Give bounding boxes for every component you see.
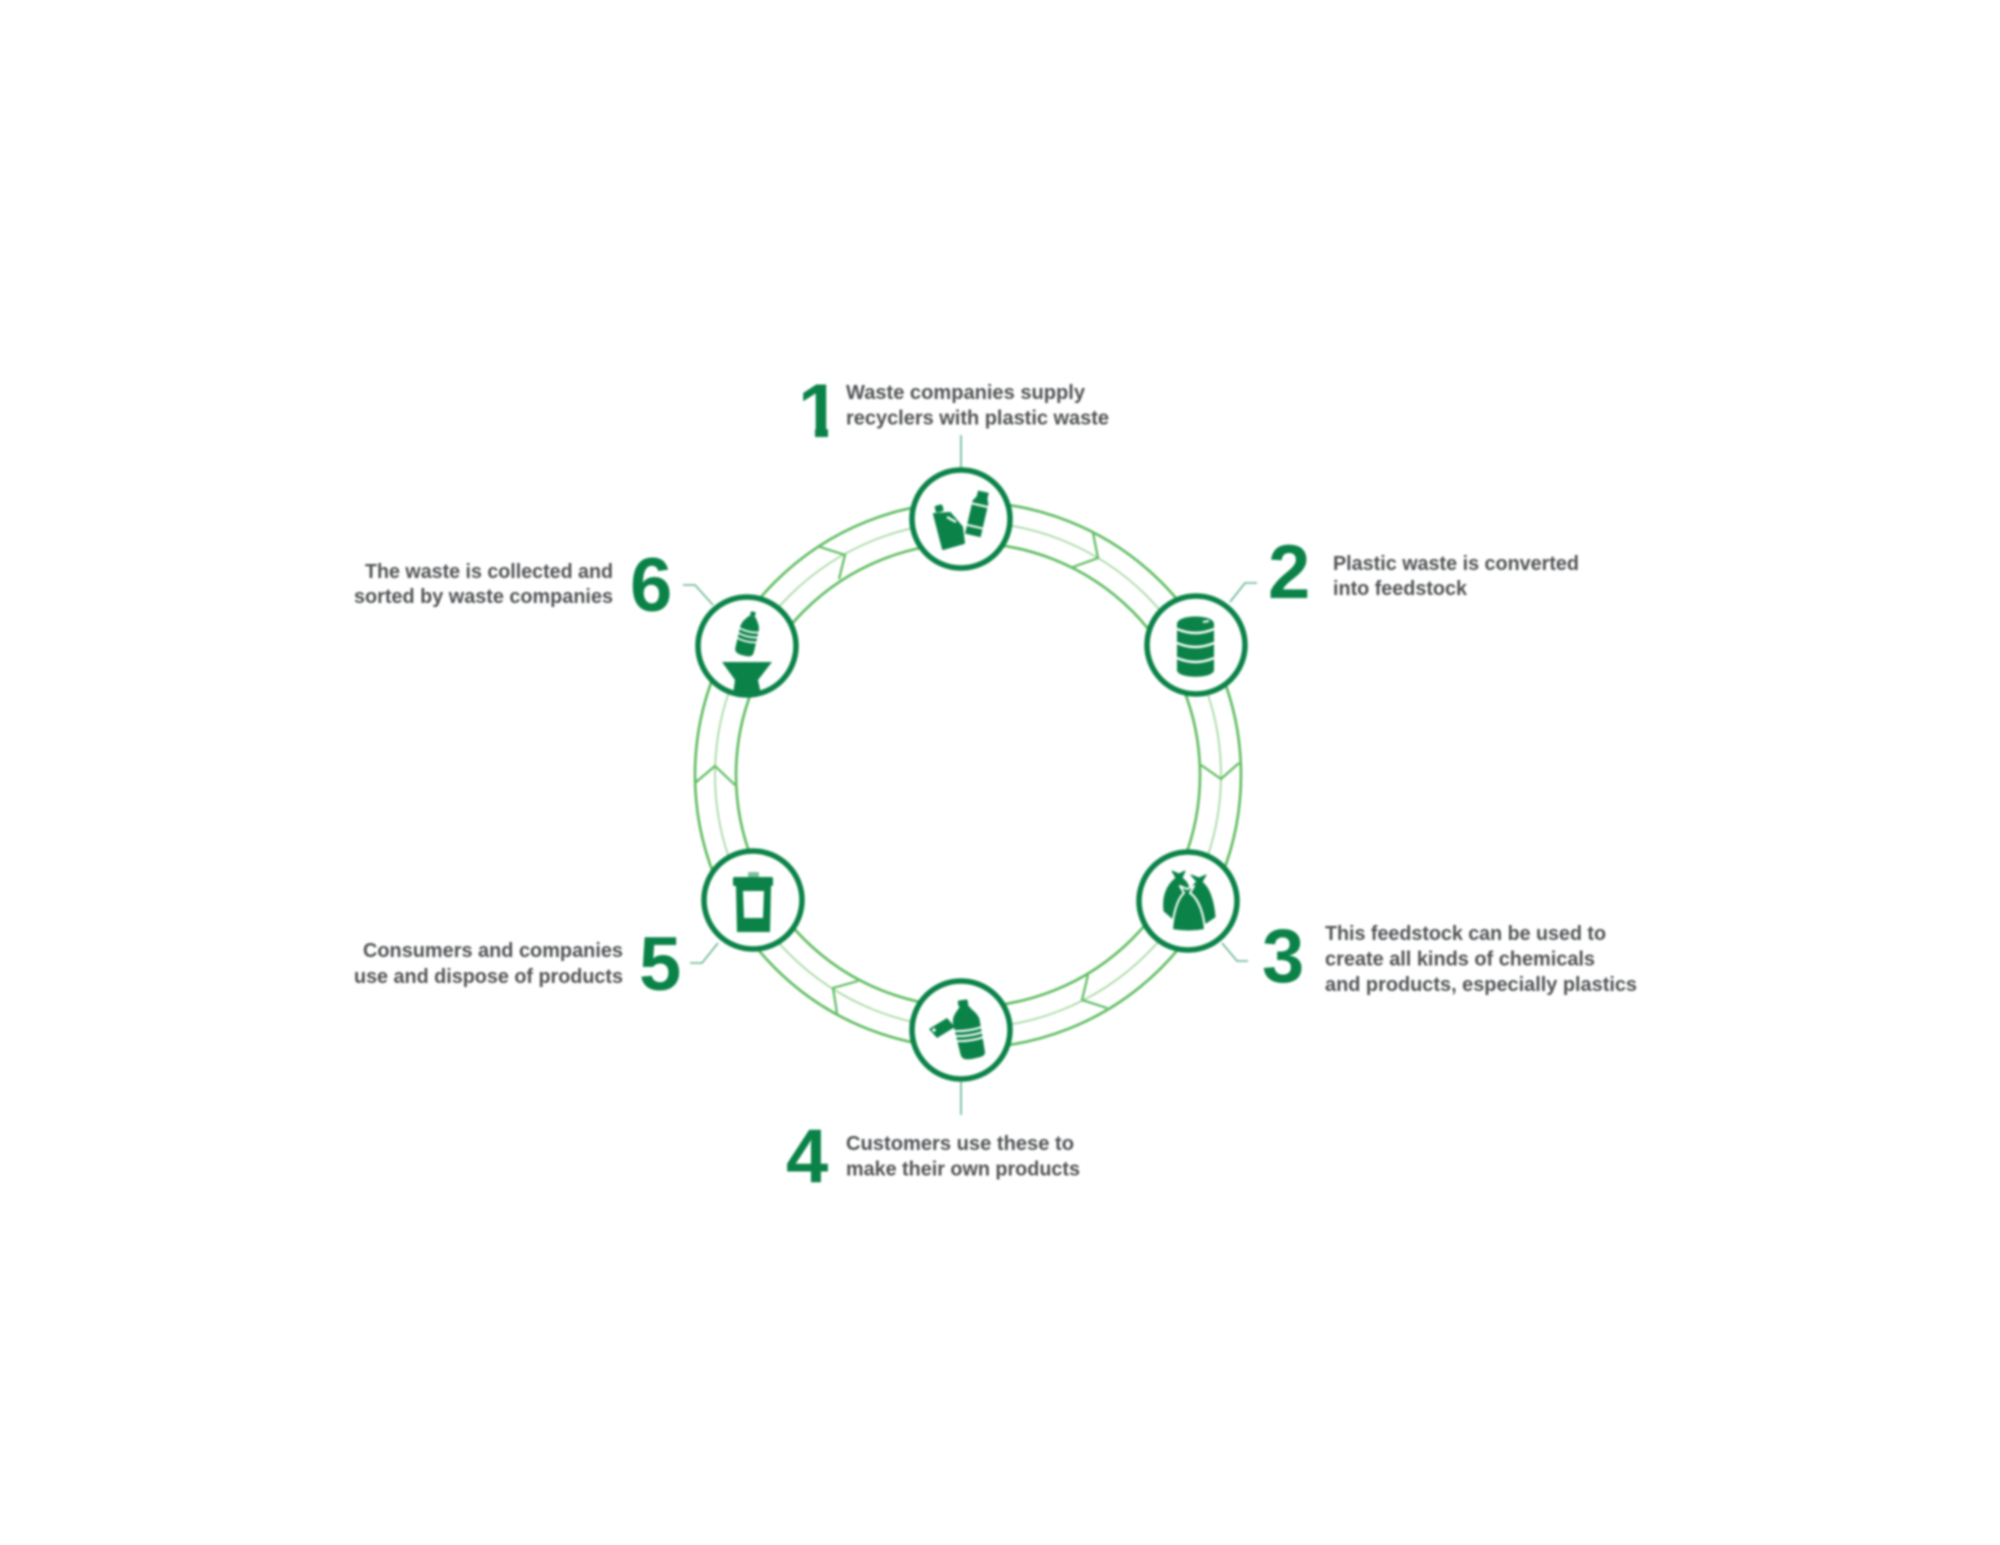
number 4: 4: [786, 1114, 828, 1199]
text 3: [1325, 923, 1637, 996]
text 5: Consumers and companies: [363, 940, 623, 962]
icon: tag: [929, 1018, 955, 1038]
label 5: [354, 922, 681, 1007]
text 1: [846, 382, 1109, 430]
step 2: node with barrel icon: [1147, 596, 1245, 694]
text 6: [354, 561, 613, 608]
number 5: 5: [639, 922, 681, 1007]
number 2: 2: [1268, 530, 1310, 615]
text 4: [846, 1133, 1080, 1180]
text 3: and products, especially plastics: [1325, 974, 1637, 996]
label 3: [1262, 914, 1637, 999]
text 2: into feedstock: [1333, 578, 1468, 600]
icon: barrel: [1177, 616, 1214, 677]
step 1: node with jug and bottle icon: [912, 470, 1010, 568]
number 6: 6: [630, 543, 672, 628]
text 3: This feedstock can be used to: [1325, 923, 1606, 945]
text 5: [354, 940, 623, 988]
step 4: node with bottle and tag icon: [912, 981, 1010, 1079]
number 1: 1: [798, 369, 840, 454]
label 6: [354, 543, 672, 628]
number 3: 3: [1262, 914, 1304, 999]
icon: garbage bags: [1164, 871, 1215, 932]
text 1: recyclers with plastic waste: [846, 408, 1109, 430]
icon: funnel: [722, 662, 772, 696]
leader lines connecting steps to labels: [683, 435, 1257, 1115]
icon: trash bin: [733, 872, 773, 932]
text 1: Waste companies supply: [846, 382, 1086, 404]
step 6: node with bottle and funnel icon: [698, 597, 796, 696]
text 6: The waste is collected and: [365, 561, 613, 583]
icon: product bottle: [952, 999, 985, 1059]
text 6: sorted by waste companies: [354, 586, 613, 608]
ring: circular flow band with arrows: [695, 502, 1241, 1048]
infographic: recycling cycle: [354, 382, 1638, 1184]
icon: jug: [934, 504, 964, 549]
text 5: use and dispose of products: [354, 966, 623, 988]
icon: sorted bottle: [733, 609, 764, 658]
text 4: make their own products: [846, 1158, 1080, 1180]
text 3: create all kinds of chemicals: [1325, 948, 1595, 970]
icon: bottle: [965, 490, 991, 537]
label 2: [1268, 530, 1579, 615]
step 3: node with garbage bags icon: [1139, 852, 1237, 950]
text 2: Plastic waste is converted: [1333, 553, 1579, 575]
text 2: [1333, 553, 1579, 600]
label 1: [801, 382, 1110, 439]
step 5: node with trash bin icon: [704, 851, 802, 949]
label 4: [786, 1114, 1080, 1199]
text 4: Customers use these to: [846, 1133, 1074, 1155]
